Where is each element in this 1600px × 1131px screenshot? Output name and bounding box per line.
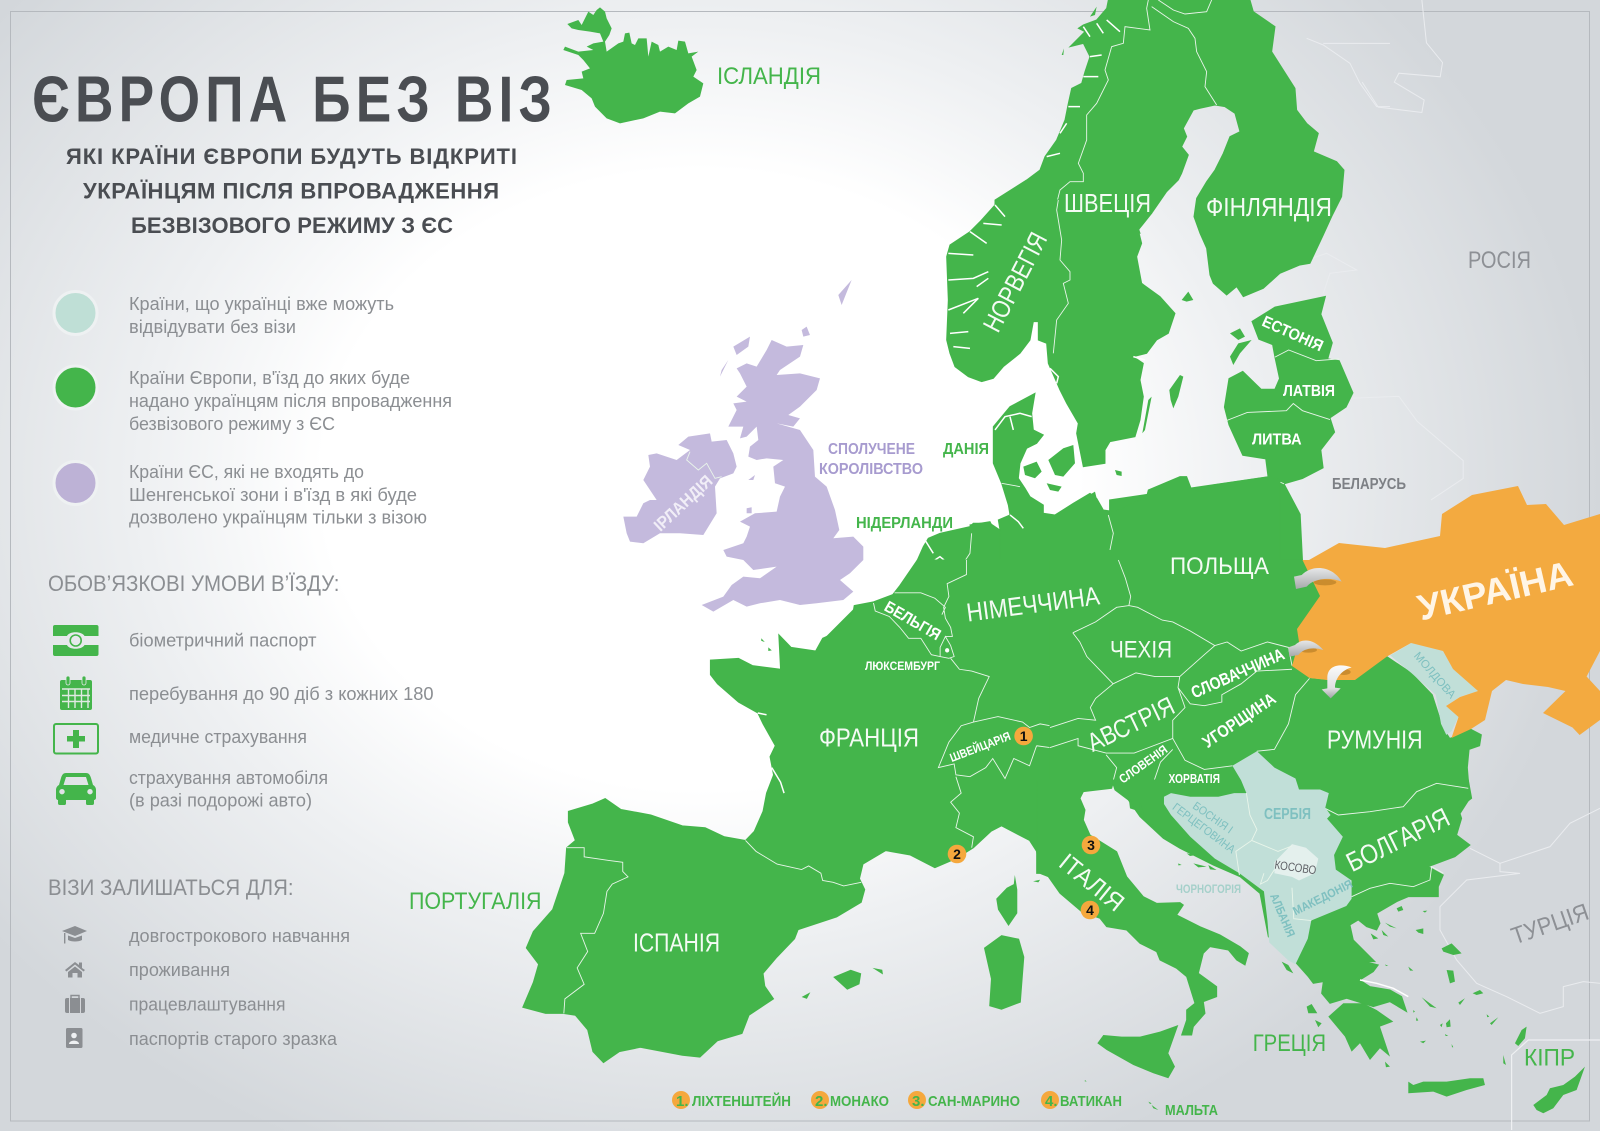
legend item: EU non-Schengen: Країни ЄС, які не входять до [129, 462, 364, 482]
subtitle: ЯКІ КРАЇНИ ЄВРОПИ БУДУТЬ ВІДКРИТІ [66, 144, 517, 169]
Benelux coast [823, 523, 1000, 640]
microstate markers on map: 1 [1020, 728, 1028, 744]
legend item: already visa-free: відвідувати без візи [129, 317, 296, 337]
bold white labels on map: УГОРЩИНА [1199, 689, 1279, 752]
white labels on map: ЧЕХІЯ [1110, 637, 1172, 664]
white labels on map: НІМЕЧЧИНА [965, 580, 1102, 628]
Southern Norway and Sweden [947, 200, 1252, 476]
white labels on map: РУМУНІЯ [1327, 725, 1422, 755]
Euboea channel [1360, 980, 1408, 997]
legend: colour key [54, 292, 452, 528]
borders [564, 560, 1050, 1013]
country labels [409, 63, 1592, 1119]
text: employment: працевлаштування [129, 994, 286, 1014]
bold white labels on map: ЛИТВА [1252, 432, 1302, 448]
text: car insurance: страхування автомобіля [129, 768, 328, 788]
bold white labels on map: ЕСТОНІЯ [1259, 313, 1326, 355]
subtitle: БЕЗВІЗОВОГО РЕЖИМУ З ЄС [131, 213, 453, 238]
teal labels: КОСОВО [1274, 858, 1317, 877]
map: UK and Ireland (purple) [623, 280, 863, 612]
Adriatic islands [1128, 795, 1217, 870]
Gironde estuary and Brittany details [758, 713, 784, 793]
purple UK label: КОРОЛІВСТВО [819, 461, 923, 478]
fjords [948, 205, 1145, 383]
Sicily [1097, 1025, 1178, 1078]
Central Europe and Romania [1050, 560, 1481, 888]
green outside labels: ІСЛАНДІЯ [717, 63, 821, 90]
white labels on map: ШВЕЦІЯ [1064, 188, 1151, 218]
Moldova [1390, 643, 1478, 735]
white labels on map: ІСПАНІЯ [633, 928, 720, 958]
map: Balkan non-EU states (teal) [1164, 643, 1478, 964]
inset frame [1512, 1040, 1600, 1130]
bold white labels on map: СЛОВАЧЧИНА [1188, 645, 1287, 702]
text: medical insurance: медичне страхування [129, 727, 307, 747]
teal labels: БОСНІЯ І [1190, 800, 1235, 836]
text: residence: проживання [129, 960, 230, 980]
microstate markers on map: 4 [1086, 902, 1094, 918]
San Marino: САН-МАРИНО [928, 1093, 1020, 1110]
white labels on map: ФІНЛЯНДІЯ [1206, 192, 1332, 222]
icon: briefcase [65, 996, 85, 1013]
Italy [1037, 780, 1248, 1035]
icon: calendar [60, 676, 92, 710]
teal labels: СЕРБІЯ [1264, 806, 1311, 823]
legend item: EU non-Schengen [54, 462, 427, 528]
heading: entry conditions: ОБОВ’ЯЗКОВІ УМОВИ В’ЇЗДУ: [48, 571, 340, 596]
Vatican: ВАТИКАН [1060, 1093, 1122, 1110]
bold white labels on map: ЛАТВІЯ [1283, 383, 1335, 400]
Great Britain [702, 340, 863, 612]
teal labels [1170, 650, 1458, 939]
white labels on map [633, 188, 1454, 958]
green outside labels: ДАНІЯ [943, 441, 989, 458]
white labels on map: ПОЛЬЩА [1170, 553, 1269, 580]
icon: medical kit [54, 724, 98, 754]
microstates legend [672, 1091, 1122, 1110]
grey neighbours: БЕЛАРУСЬ [1332, 476, 1406, 493]
Croatia coast, Greece mainland, Bulgaria [1112, 780, 1472, 1012]
bold white labels on map: СЛОВЕНІЯ [1116, 742, 1170, 786]
text: old passports: паспортів старого зразка [129, 1029, 338, 1049]
legend item: visa-free after regime: Країни Європи, в'їзд до яких буде [129, 368, 410, 388]
France, Iberia, west Mediterranean [523, 560, 1050, 1063]
green outside labels: НІДЕРЛАНДИ [856, 515, 953, 532]
bold white labels on map: ХОРВАТІЯ [1168, 772, 1220, 786]
islands [720, 280, 852, 513]
text: car insurance: (в разі подорожі авто) [129, 790, 312, 810]
microstate markers on map: 3 [1087, 837, 1095, 853]
bold white labels on map: УКРАЇНА [1414, 553, 1577, 628]
Monaco: МОНАКО [830, 1093, 889, 1110]
text: long-term study: довгострокового навчання [129, 926, 350, 946]
heading: visas remain for: ВІЗИ ЗАЛИШАТЬСЯ ДЛЯ: [48, 875, 294, 900]
green outside labels: МАЛЬТА [1165, 1103, 1218, 1119]
Monaco: 2. [815, 1093, 828, 1110]
teal labels: АЛБАНІЯ [1267, 891, 1298, 939]
green outside labels: ГРЕЦІЯ [1253, 1030, 1326, 1057]
white labels on map: АВСТРІЯ [1082, 690, 1179, 758]
Gotland, Oland, Bornholm, Aland, Saaremaa, Hiiumaa [1115, 292, 1252, 476]
green outside labels: ПОРТУГАЛІЯ [409, 888, 542, 915]
map: Ukraine [1292, 486, 1600, 738]
bold white labels on map [650, 313, 1577, 786]
grey neighbours: ТУРЦІЯ [1508, 899, 1592, 950]
icon: graduation cap [62, 926, 87, 944]
legend item: EU non-Schengen: дозволено українцям тільки з візою [129, 508, 427, 528]
Corsica, Sardinia, Balearics, Elba [761, 638, 1040, 1010]
bold white labels on map: ІРЛАНДІЯ [650, 472, 717, 535]
subtitle: УКРАЇНЦЯМ ПІСЛЯ ВПРОВАДЖЕННЯ [83, 178, 499, 204]
Malta [1085, 1080, 1158, 1110]
Peloponnese [1328, 1003, 1393, 1060]
San Marino: 3. [912, 1093, 925, 1110]
legend item: already visa-free: Країни, що українці вже можуть [129, 294, 394, 314]
text: car insurance [129, 768, 328, 810]
legend item: already visa-free [54, 292, 394, 337]
white labels on map: НОРВЕГІЯ [977, 227, 1053, 337]
Vatican [1041, 1091, 1122, 1110]
faint neighbouring borders: Russia, Belarus, Turkey [1307, 0, 1600, 1013]
conditions list [53, 625, 434, 810]
white labels on map: БОЛГАРІЯ [1342, 802, 1454, 878]
green outside labels: КІПР [1524, 1044, 1575, 1072]
Monaco [811, 1091, 889, 1110]
purple UK label [819, 441, 923, 478]
Greek islands [1282, 783, 1600, 1130]
legend item: visa-free after regime [54, 366, 452, 434]
subtitle [66, 144, 517, 238]
arrows from Ukraine [1288, 568, 1352, 698]
icon: car [56, 773, 96, 805]
Danish islands [1023, 445, 1097, 502]
green outside labels [409, 63, 1575, 1119]
text: 90 days: перебування до 90 діб з кожних 180 [129, 684, 434, 704]
purple UK label: СПОЛУЧЕНЕ [828, 441, 915, 458]
microstate markers on map: 2 [953, 846, 961, 862]
legend item: EU non-Schengen: Шенгенської зони і в'їзд в які буде [129, 485, 417, 505]
legend item: visa-free after regime: безвізового режиму з ЄС [129, 414, 335, 434]
icon: house [65, 962, 85, 978]
teal labels: МОЛДОВА [1411, 650, 1458, 701]
icon: old passport [66, 1028, 82, 1048]
legend item: visa-free after regime: надано українцям після впровадження [129, 391, 452, 411]
teal labels: ЧОРНОГОРІЯ [1176, 882, 1241, 896]
bold white labels on map: БЕЛЬГІЯ [881, 598, 943, 644]
Liechtenstein: ЛІХТЕНШТЕЙН [692, 1092, 791, 1110]
teal labels: ГЕРЦЕГОВИНА [1170, 801, 1237, 856]
bold white labels on map: ЛЮКСЕМБУРГ [865, 659, 940, 673]
bold white labels on map: ШВЕЙЦАРІЯ [947, 728, 1013, 765]
Ireland [623, 433, 737, 543]
Cyprus [1533, 1067, 1585, 1113]
grey neighbours: РОСІЯ [1468, 247, 1531, 274]
Liechtenstein [672, 1091, 791, 1110]
Kosovo [1274, 844, 1318, 880]
visas remain list [62, 926, 350, 1049]
title: ЄВРОПА БЕЗ ВІЗ [32, 62, 552, 136]
Baltic states [1110, 296, 1353, 560]
Denmark, north Germany, Poland coast [930, 393, 1280, 562]
Liechtenstein: 1. [676, 1093, 689, 1110]
white labels on map: ФРАНЦІЯ [819, 722, 919, 752]
Northern Scandinavia and Finland [995, 0, 1344, 297]
teal labels: МАКЕДОНІЯ [1291, 877, 1355, 918]
icon: passport [53, 625, 98, 656]
Vatican: 4. [1045, 1093, 1058, 1110]
microstate markers on map [948, 727, 1100, 919]
Italy, Balkans, Greece [1037, 780, 1600, 1130]
grey neighbours [1332, 247, 1592, 950]
San Marino [908, 1091, 1020, 1110]
map: green Schengen countries [523, 0, 1600, 1130]
Romania-Bulgaria and Bulgaria-Greece borders [1325, 783, 1468, 897]
white labels on map: ІТАЛІЯ [1053, 848, 1129, 917]
text: biometric passport: біометричний паспорт [129, 631, 316, 651]
Iceland [563, 7, 703, 123]
